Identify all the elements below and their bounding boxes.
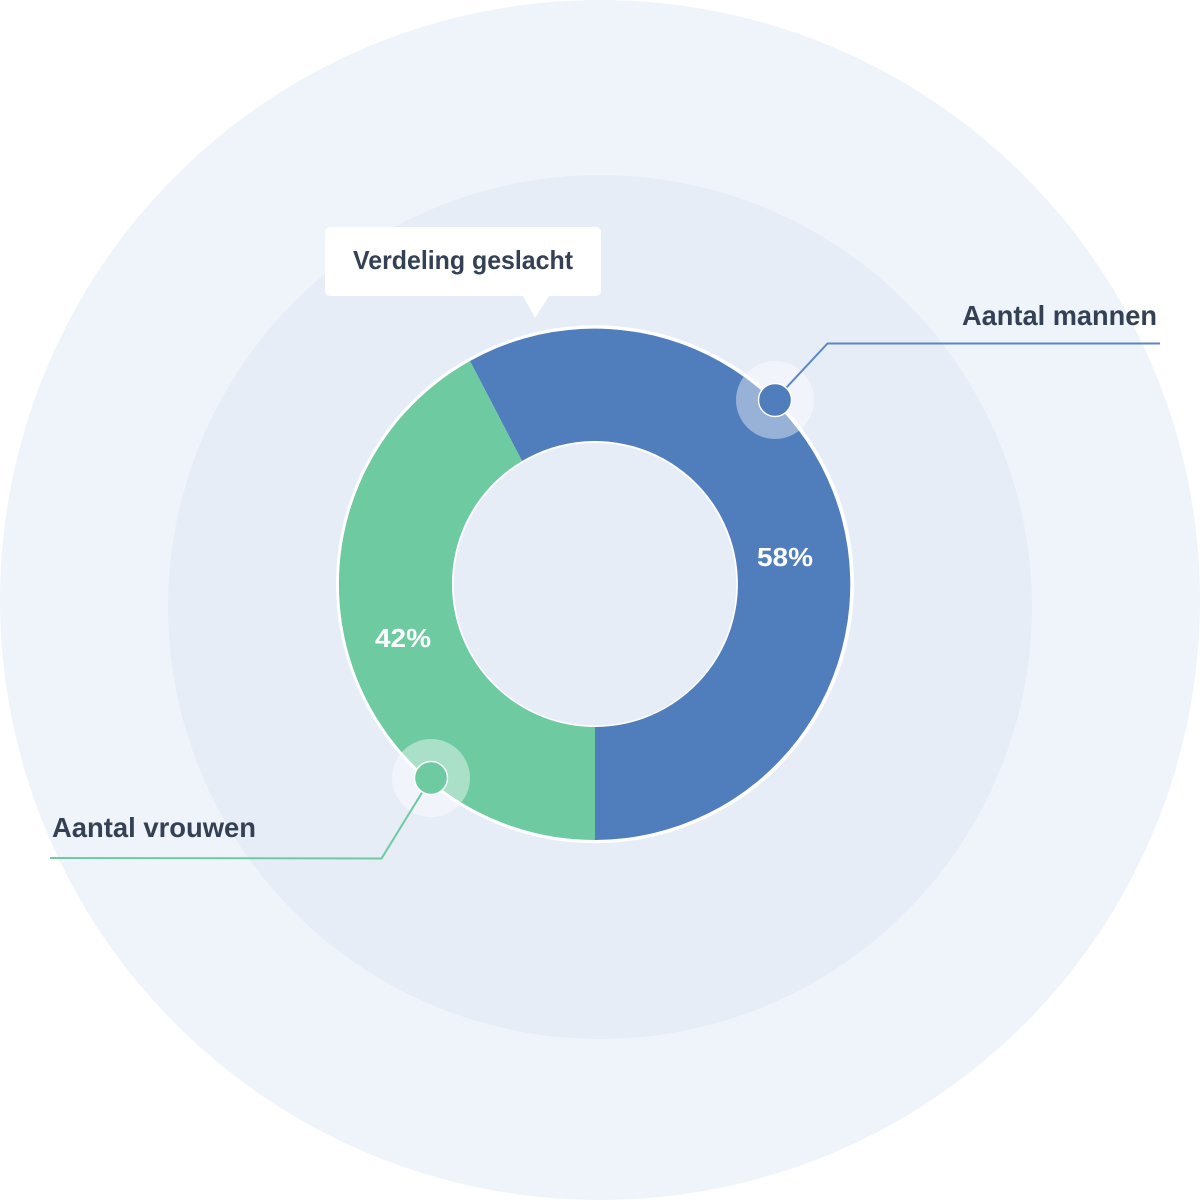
value: 42%: 42% <box>375 623 431 653</box>
callout: chart title <box>325 227 601 318</box>
marker halo <box>736 361 814 439</box>
segment: women 42% <box>339 361 595 840</box>
marker halo <box>392 739 470 817</box>
value: 58%: 58% <box>757 542 813 572</box>
segment: men 58% <box>470 329 850 840</box>
callout heading: Verdeling geslacht <box>353 245 573 275</box>
marker dot <box>414 762 448 794</box>
marker dot <box>758 384 792 416</box>
donut white outline <box>336 325 854 843</box>
leader line <box>786 344 1160 388</box>
marker: men <box>736 300 1160 439</box>
background circle: inner <box>168 175 1032 1039</box>
label: women: Aantal vrouwen <box>52 812 256 843</box>
callout box <box>325 227 601 318</box>
marker: women <box>50 739 470 858</box>
label: men: Aantal mannen <box>962 300 1157 331</box>
donut hole <box>454 443 736 726</box>
donut chart <box>336 325 854 843</box>
leader line <box>50 791 423 858</box>
